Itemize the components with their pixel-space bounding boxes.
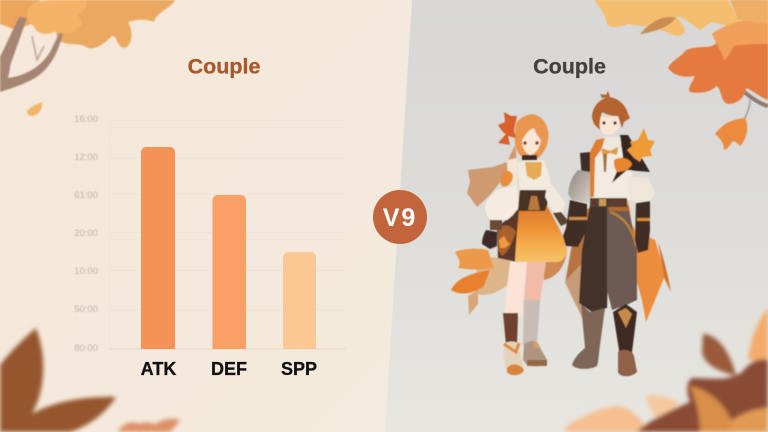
boy trousers (579, 205, 637, 312)
girl head and hair (515, 114, 549, 160)
bar: SPP (283, 252, 316, 349)
bar labels: DEF (211, 359, 247, 379)
y axis labels: 10:00 (74, 266, 98, 277)
girl hair leaf (498, 112, 517, 145)
y axis labels (74, 114, 98, 354)
bar labels (141, 359, 317, 379)
boy head and hair (592, 91, 630, 135)
boy cape (565, 183, 671, 322)
girl leaf cape (451, 249, 567, 315)
bar labels: ATK (141, 359, 176, 379)
foliage: top left branch and leaves (0, 0, 175, 116)
girl legs (503, 262, 547, 375)
boy shoulder leaves (614, 128, 655, 172)
foliage: bottom left blurred leaves (0, 328, 180, 432)
y axis labels: 80:00 (74, 343, 98, 354)
badge: V9: V9 (383, 204, 417, 232)
boy shirt (592, 137, 632, 200)
girl flowing hair (467, 145, 517, 207)
girl torso (517, 160, 550, 211)
y axis labels: 50:00 (74, 304, 98, 315)
title: right Couple heading: Couple (533, 54, 606, 78)
girl sleeves and gloves (482, 158, 569, 249)
title: left Couple heading: Couple (188, 54, 260, 78)
y axis labels: 61:00 (74, 190, 98, 201)
y axis labels: 12:00 (74, 152, 98, 163)
y axis labels: 20:00 (74, 228, 98, 239)
boy jacket (580, 135, 650, 197)
illustration: boy character (563, 91, 671, 376)
foliage: top right branch and leaves (594, 0, 768, 150)
badge: V9 (373, 190, 427, 244)
chart baseline (110, 348, 346, 350)
bar labels: SPP (281, 359, 317, 379)
chart gridlines (110, 120, 346, 349)
bar: ATK (141, 147, 175, 349)
girl skirt (497, 206, 567, 262)
bar chart: ATK DEF SPP (74, 114, 346, 379)
foliage: bottom right blurred leaves (564, 308, 768, 432)
boy sleeves and gloves (563, 170, 655, 253)
panel: right background (385, 0, 768, 432)
boy belt (590, 198, 629, 211)
bar: DEF (212, 195, 246, 349)
illustration: girl character (451, 112, 569, 375)
y axis labels: 16:00 (74, 114, 98, 125)
boy boots (572, 304, 637, 376)
panel: left background (0, 0, 420, 432)
